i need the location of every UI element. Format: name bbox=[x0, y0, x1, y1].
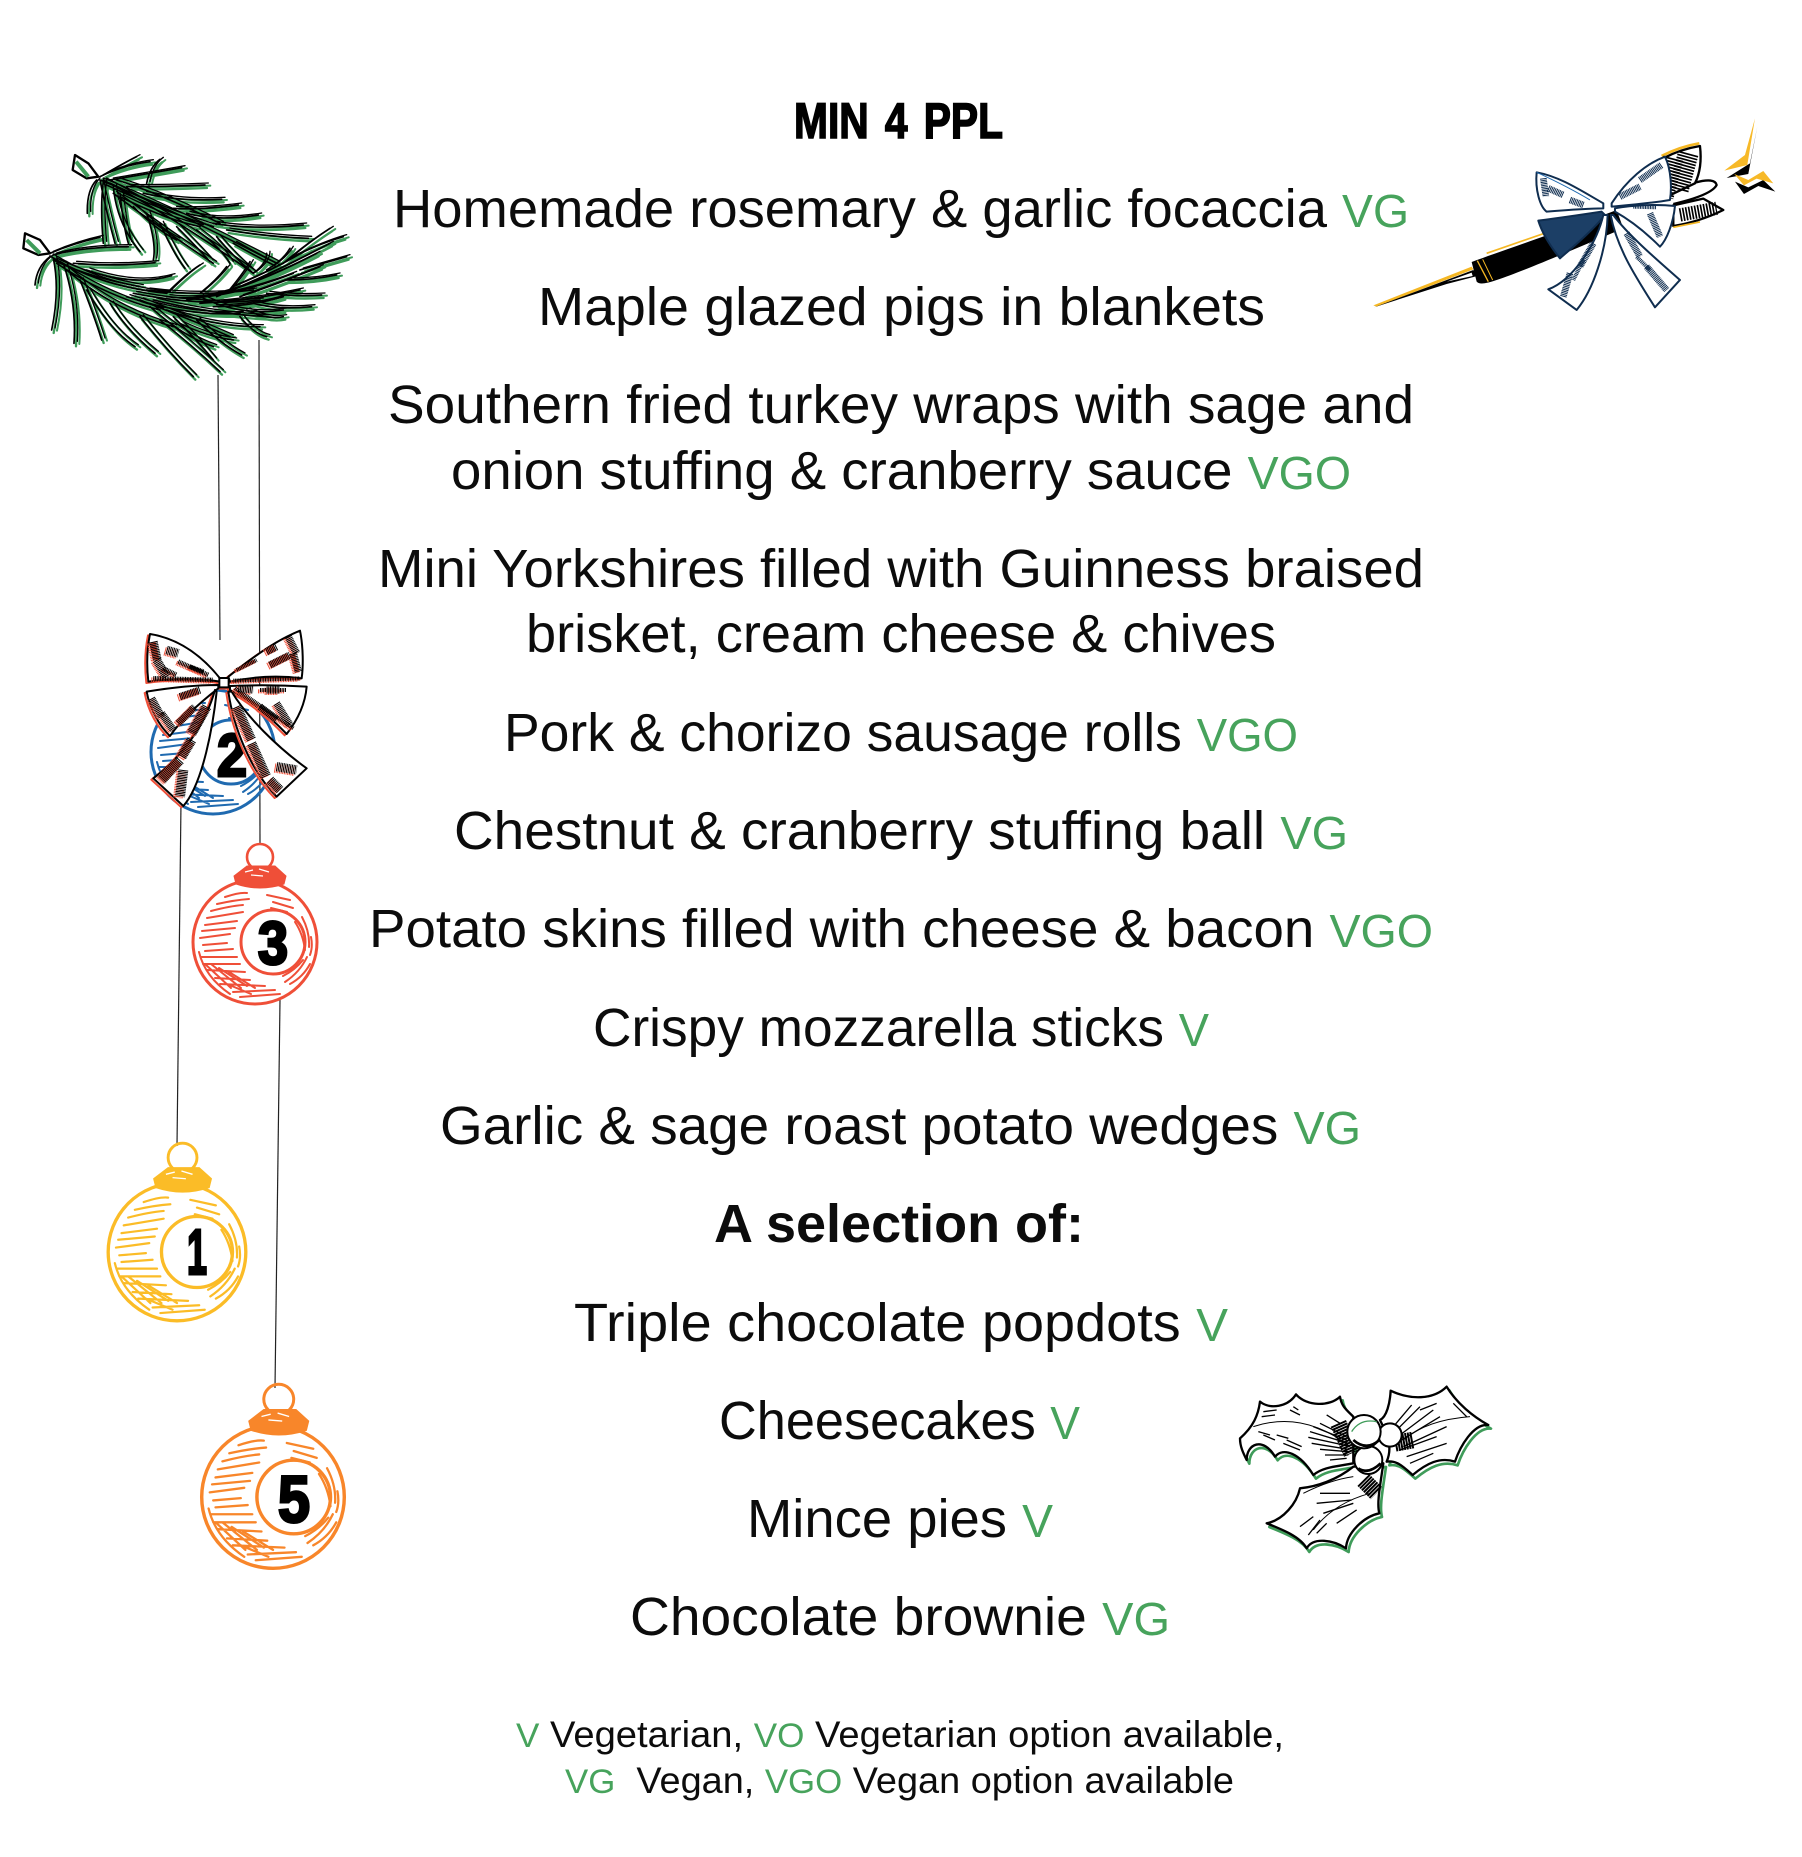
item: sausage rolls: Pork & chorizo sausage rolls VGO bbox=[504, 703, 1298, 763]
legend line 1: V Vegetarian, VO Vegetarian option available, bbox=[516, 1714, 1284, 1755]
heading: a selection of: A selection of: bbox=[714, 1194, 1084, 1254]
ornament 2 number: 2 bbox=[217, 722, 247, 789]
ornament 5: orange ball bbox=[202, 1384, 344, 1568]
string: ornament 1 bbox=[177, 802, 181, 1146]
item: popdots: Triple chocolate popdots V bbox=[574, 1293, 1228, 1353]
ornament 3: red ball: 3 bbox=[258, 910, 288, 977]
legend bbox=[516, 1714, 1284, 1801]
string: ornament 2 bbox=[218, 375, 220, 640]
string: ornament 5 bbox=[275, 1000, 280, 1388]
ornament 3: red ball bbox=[193, 844, 317, 1004]
item: Yorkshires line 2: brisket, cream cheese & chives bbox=[526, 604, 1276, 664]
item: turkey wraps line 1: Southern fried turkey wraps with sage and bbox=[388, 375, 1414, 435]
item: cheesecakes: Cheesecakes V bbox=[719, 1391, 1080, 1451]
item: potato wedges: Garlic & sage roast potato wedges VG bbox=[440, 1096, 1361, 1156]
icon: holly bbox=[1240, 1387, 1491, 1552]
item: potato skins: Potato skins filled with cheese & bacon VGO bbox=[369, 899, 1433, 959]
menu items bbox=[369, 179, 1433, 1647]
dart flights bbox=[1660, 143, 1723, 227]
dart barrel bbox=[1472, 210, 1623, 283]
legend line 2: VG Vegan, VGO Vegan option available bbox=[565, 1760, 1234, 1801]
item: brownie: Chocolate brownie VG bbox=[630, 1587, 1170, 1647]
string: ornament 3 bbox=[259, 340, 260, 845]
ornament 2: blue ball bbox=[151, 690, 275, 814]
title: MIN 4 PPL bbox=[794, 93, 1003, 149]
item: turkey wraps line 2: onion stuffing & cranberry sauce VGO bbox=[451, 441, 1351, 501]
item: pigs in blankets: Maple glazed pigs in blankets bbox=[538, 277, 1265, 337]
ornament 5: orange ball: 5 bbox=[278, 1462, 310, 1536]
ornament 1: yellow ball bbox=[108, 1143, 246, 1321]
spark bbox=[1724, 118, 1775, 194]
item: mince pies: Mince pies V bbox=[747, 1489, 1053, 1549]
icon: dart with blue bow bbox=[1373, 118, 1775, 310]
dart needle bbox=[1373, 267, 1477, 307]
ornament 1: yellow ball: 1 bbox=[187, 1216, 207, 1288]
icon: rosemary sprigs bbox=[23, 155, 352, 380]
item: mozzarella sticks: Crispy mozzarella sticks V bbox=[593, 998, 1209, 1058]
item: Yorkshires line 1: Mini Yorkshires filled with Guinness braised bbox=[378, 539, 1424, 599]
item: focaccia: Homemade rosemary & garlic focaccia VG bbox=[393, 179, 1409, 239]
item: stuffing ball: Chestnut & cranberry stuffing ball VG bbox=[454, 801, 1348, 861]
icon: red and black bow bbox=[145, 631, 307, 807]
blue bow bbox=[1536, 157, 1680, 310]
